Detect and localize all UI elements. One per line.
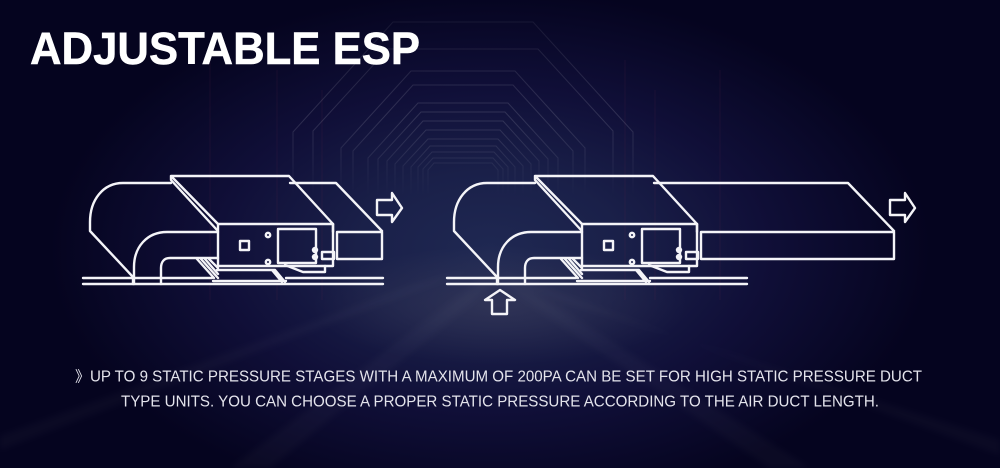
- title: ADJUSTABLE ESP: [30, 23, 420, 74]
- supply air duct: [290, 183, 382, 259]
- floor lines: [447, 278, 747, 284]
- description: [75, 368, 923, 410]
- line 2: TYPE UNITS. YOU CAN CHOOSE A PROPER STATIC PRESSURE ACCORDING TO THE AIR DUCT LENGTH.: [121, 394, 879, 410]
- diagram: long duct unit: [447, 176, 894, 284]
- return air duct: [90, 183, 218, 284]
- description: UP TO 9 STATIC PRESSURE STAGES WITH A MAXIMUM OF 200PA CAN BE SET FOR HIGH STATIC PRESSURE DUCT: [90, 368, 923, 386]
- supply air duct: [654, 183, 894, 259]
- unit body: [582, 224, 698, 272]
- unit body: [218, 224, 334, 272]
- return air duct: [454, 183, 582, 284]
- grille: [197, 259, 286, 282]
- arrow: long duct outlet: [890, 193, 915, 222]
- line 1: 》: [75, 368, 90, 386]
- arrow: short duct outlet: [377, 193, 402, 222]
- diagram: short duct unit: [83, 176, 383, 284]
- top panel: [171, 176, 333, 230]
- top panel: [535, 176, 697, 230]
- arrow: inlet up: [485, 290, 515, 314]
- grille: [561, 259, 650, 282]
- floor lines: [83, 278, 383, 284]
